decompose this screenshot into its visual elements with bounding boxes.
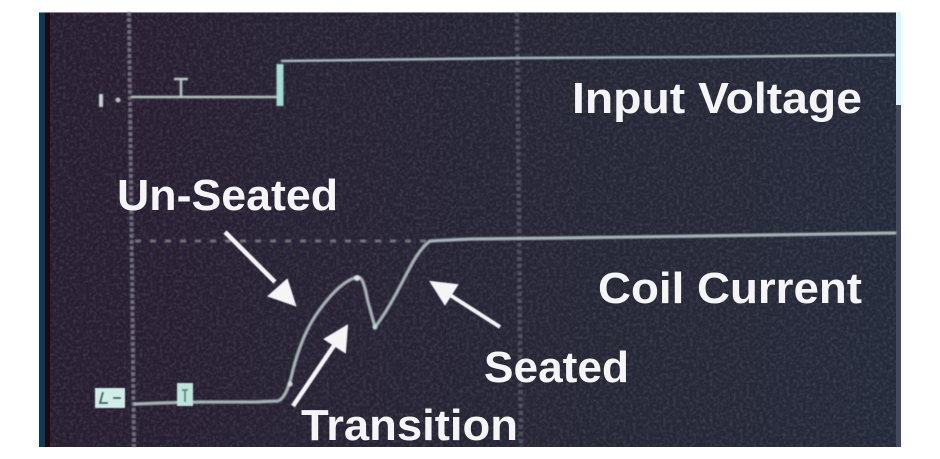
label: transition: Transition — [301, 401, 518, 450]
right screen edge — [896, 12, 901, 447]
label: seated: Seated — [484, 343, 629, 392]
arrow: transition — [293, 326, 347, 406]
graticule — [129, 12, 807, 447]
label: input voltage: Input Voltage — [572, 74, 862, 123]
label: un-seated: Un-Seated — [117, 171, 338, 220]
channel markers — [95, 383, 193, 408]
input voltage trace — [101, 55, 895, 107]
label: coil current: Coil Current — [598, 264, 862, 313]
arrow: un-seated — [225, 232, 295, 305]
arrow: seated — [431, 282, 500, 327]
coil current trace — [135, 233, 895, 404]
